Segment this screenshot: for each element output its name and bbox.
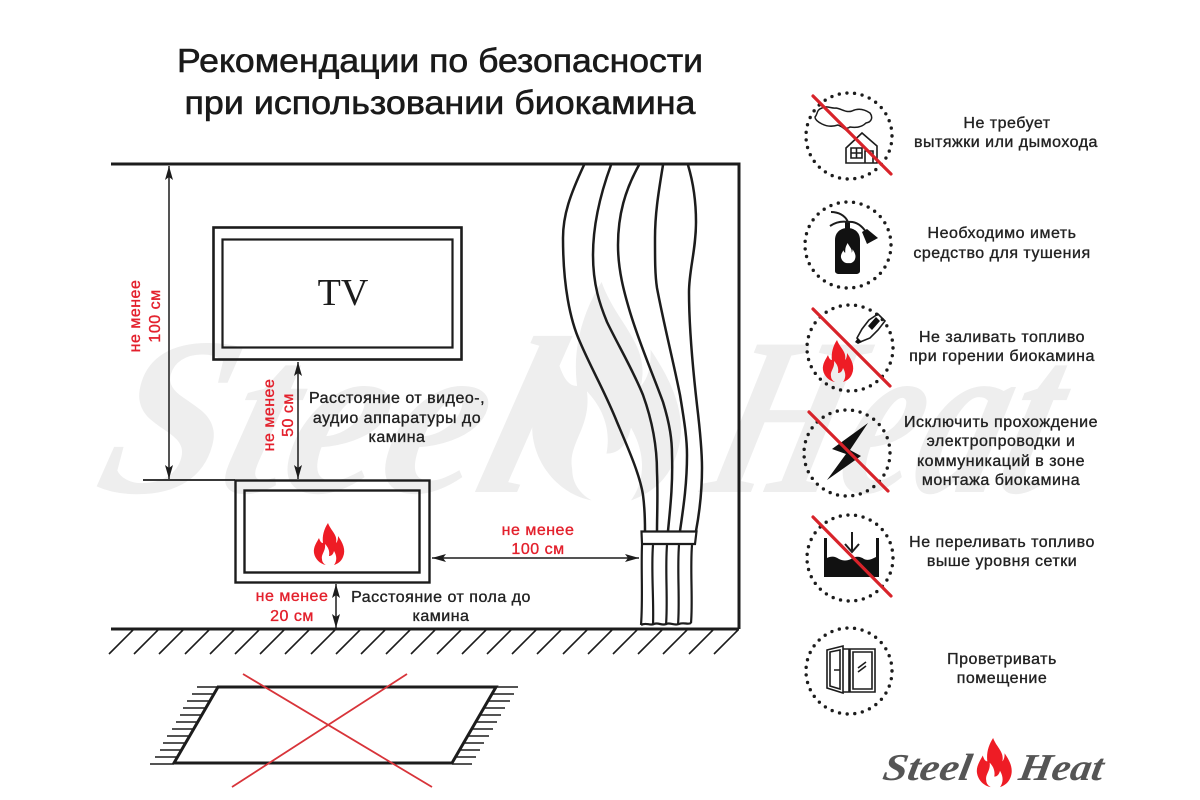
title: при использовании биокамина <box>184 84 696 121</box>
icon: no chimney needed <box>806 93 892 179</box>
watermark: Steel Heat: Steel <box>78 292 585 541</box>
text: ventilate: Проветривать <box>947 651 1057 668</box>
text: no wiring: электропроводки и <box>927 433 1075 450</box>
logo: Steel Heat: Steel <box>880 747 976 789</box>
label: not less than 100 cm horizontal <box>502 522 574 558</box>
text: extinguisher: средство для тушения <box>913 245 1091 262</box>
curtain <box>563 165 702 625</box>
label: not less than 100 cm vertical <box>127 280 164 352</box>
arrow: wall to fireplace 100 cm <box>168 166 170 479</box>
label: distance from floor: Расстояние от пола до <box>351 589 531 606</box>
curtain tie band <box>642 532 696 544</box>
text: no wiring <box>904 414 1098 489</box>
floor with hatching <box>109 629 739 654</box>
TV: TV <box>318 272 369 314</box>
icon: do not refuel while burning <box>807 305 893 391</box>
text: do not refuel: при горении биокамина <box>909 348 1095 365</box>
text: no chimney <box>914 115 1098 151</box>
text: no wiring: монтажа биокамина <box>922 472 1080 489</box>
TV <box>214 228 462 360</box>
text: no wiring: коммуникаций в зоне <box>917 453 1085 470</box>
text: extinguisher: Необходимо иметь <box>928 225 1076 242</box>
icon: fire extinguisher <box>805 202 891 288</box>
label: distance from video equipment: Расстояние от видео-, <box>309 390 485 407</box>
text: do not overfill <box>909 534 1095 570</box>
arrow: TV to fireplace 50 cm <box>297 362 299 479</box>
title: Рекомендации по безопасности <box>177 42 703 79</box>
label: not less than 100 cm vertical: 100 см <box>147 289 164 343</box>
text: ventilate <box>947 651 1057 687</box>
label: not less than 100 cm vertical: не менее <box>127 280 144 352</box>
icon: flame <box>314 523 344 565</box>
title <box>177 42 703 121</box>
label: distance from floor <box>351 589 531 625</box>
label: distance from floor: камина <box>413 608 469 625</box>
crossed-out rug <box>150 674 518 787</box>
text: do not refuel <box>909 329 1095 365</box>
watermark: Steel Heat <box>78 282 1098 541</box>
fireplace <box>143 480 430 582</box>
text: no wiring: Исключить прохождение <box>904 414 1098 431</box>
text: no chimney: вытяжки или дымохода <box>914 134 1098 151</box>
watermark: Steel Heat: Heat <box>685 292 1098 541</box>
label: not less than 20 cm: не менее <box>256 588 328 605</box>
arrow: fireplace to floor 20 cm <box>335 584 337 628</box>
text: do not overfill: выше уровня сетки <box>927 553 1077 570</box>
label: not less than 100 cm horizontal: 100 см <box>511 541 565 558</box>
text: ventilate: помещение <box>957 670 1047 687</box>
text: extinguisher <box>913 225 1091 262</box>
label: not less than 20 cm <box>256 588 328 625</box>
label: not less than 50 cm vertical: не менее <box>261 379 278 451</box>
wall outline <box>111 164 739 629</box>
text: no chimney: Не требует <box>963 115 1051 132</box>
label: distance from video equipment: камина <box>369 429 425 446</box>
text: do not overfill: Не переливать топливо <box>909 534 1095 551</box>
icon: do not overfill <box>807 515 893 601</box>
label: not less than 20 cm: 20 см <box>270 608 314 625</box>
icon: no electrical wiring <box>804 410 890 496</box>
logo: Steel Heat <box>880 738 1109 789</box>
label: not less than 100 cm horizontal: не менее <box>502 522 574 539</box>
text: do not refuel: Не заливать топливо <box>919 329 1085 346</box>
label: distance from video equipment <box>309 390 485 446</box>
icon: window ventilation <box>806 628 892 714</box>
arrow: fireplace to curtain 100 cm <box>432 557 639 559</box>
label: distance from video equipment: аудио аппаратуры до <box>313 410 481 427</box>
label: not less than 50 cm vertical: 50 см <box>280 393 297 437</box>
logo: Steel Heat: Heat <box>1015 747 1109 789</box>
label: not less than 50 cm vertical <box>261 379 297 451</box>
